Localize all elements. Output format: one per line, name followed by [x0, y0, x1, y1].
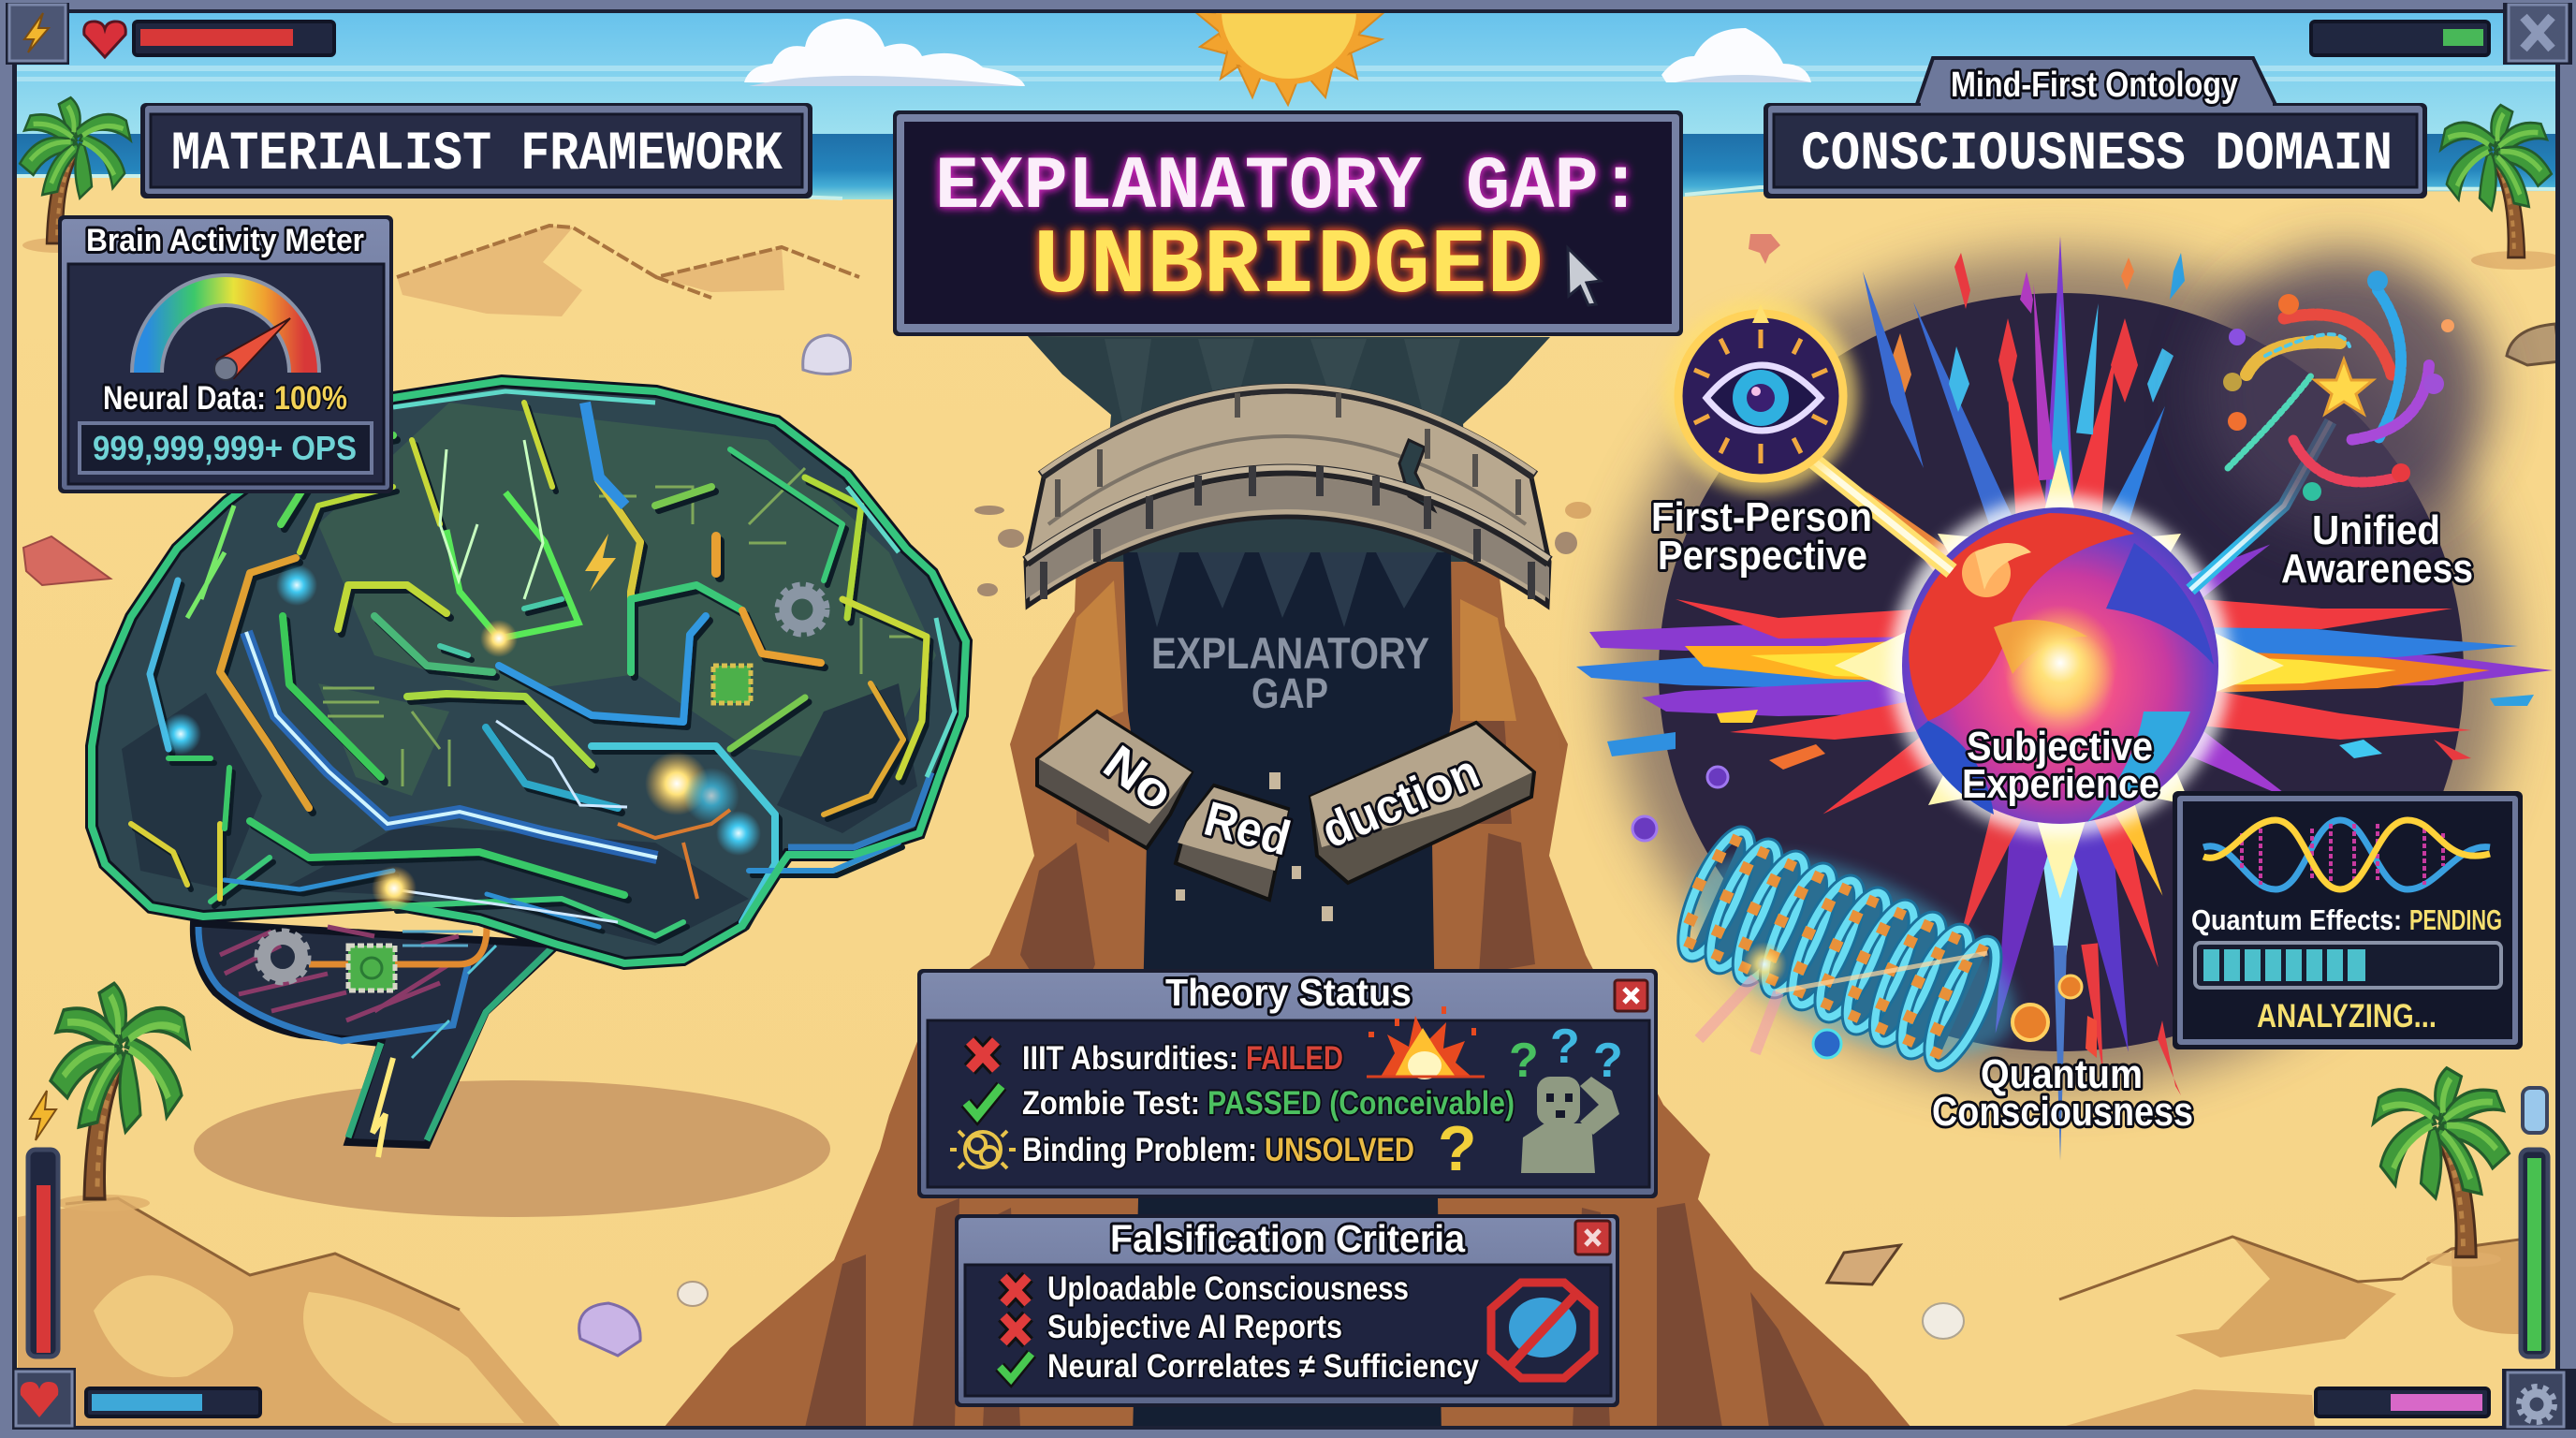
heading: consciousness domain with tab: Mind-First Ontology: [1951, 66, 2238, 105]
icon: question marks: ?: [1550, 1020, 1580, 1074]
status rows: [966, 1040, 1515, 1168]
labels on the consciousness domain: Experience: [1962, 761, 2159, 807]
status rows: PASSED (Conceivable): [1208, 1085, 1515, 1122]
left streaks: [1589, 618, 1919, 651]
gap label: GAP: [1251, 669, 1328, 717]
chip: [348, 946, 395, 990]
broken bridge slabs: No / Red / duction: Red: [1198, 792, 1295, 866]
dark cosmic halo: [1610, 253, 2509, 1086]
criteria rows: Uploadable Consciousness: [1047, 1270, 1409, 1307]
burst of colored rays: [1576, 236, 2553, 1161]
heading: materialist framework: MATERIALIST FRAMEWORK: [171, 125, 783, 185]
icon: quantum microtubule: [1661, 812, 2043, 1097]
heading: consciousness domain with tab: [1764, 58, 2427, 198]
corner button: heart: [12, 1368, 76, 1430]
circuit traces: [131, 403, 927, 936]
icon: question marks: [1438, 1020, 1623, 1184]
diagonals: [2042, 236, 2076, 545]
icon: question marks: ?: [1593, 1034, 1623, 1088]
labels on the consciousness domain: Perspective: [1658, 533, 1867, 579]
icon: galaxy: [2199, 253, 2489, 534]
status rows: IIIT Absurdities:: [1022, 1040, 1238, 1077]
hud: top right energy bar: [2311, 22, 2489, 55]
icon: question marks: ?: [1438, 1113, 1477, 1184]
gap label: [1151, 628, 1429, 717]
labels on the consciousness domain: Unified: [2312, 507, 2440, 553]
broken bridge slabs: No / Red / duction: duction: [1314, 744, 1487, 858]
cerebrum: [92, 381, 966, 963]
chip: [713, 666, 751, 703]
wave: [2203, 820, 2490, 889]
floating shards: [1863, 253, 2185, 1095]
panel: theory status: Theory Status: [1165, 971, 1412, 1014]
panel: quantum effects: [2173, 791, 2523, 1049]
icon: no brain sign: [1491, 1283, 1594, 1378]
labels on the consciousness domain: Awareness: [2281, 546, 2473, 592]
outline colour: [92, 381, 966, 963]
labels on the consciousness domain: [1651, 494, 2473, 1135]
progress bar: [2195, 943, 2501, 988]
panel: brain activity meter: [58, 215, 393, 493]
panel: quantum effects: ANALYZING...: [2257, 998, 2437, 1034]
beams: [1811, 459, 1952, 571]
dunes: lower right: [2059, 1237, 2520, 1428]
hud: lower right bar: [2316, 1388, 2489, 1416]
panel: falsification criteria: [955, 1214, 1619, 1407]
criteria rows: Subjective AI Reports: [1047, 1309, 1342, 1345]
criteria rows: Neural Correlates ≠ Sufficiency: [1047, 1348, 1479, 1385]
right streaks: [2200, 646, 2553, 688]
heading: consciousness domain with tab: CONSCIOUSNESS DOMAIN: [1801, 125, 2393, 185]
labels on the consciousness domain: Subjective: [1967, 724, 2153, 770]
broken bridge slabs: No / Red / duction: No: [1093, 735, 1183, 821]
gap label: EXPLANATORY: [1151, 628, 1429, 678]
dunes: lower left: [18, 1198, 562, 1428]
hud: health heart and bar: [84, 22, 334, 57]
panel: brain activity meter: Brain Activity Meter: [86, 223, 364, 258]
dunes: upper left: [397, 226, 859, 316]
clouds: [744, 19, 1811, 86]
blue lightning: [246, 632, 657, 858]
status rows: Zombie Test:: [1022, 1085, 1200, 1122]
central orb: [1890, 495, 2231, 836]
bridge: [1026, 386, 1549, 606]
icon: confused zombie: [1521, 1077, 1619, 1173]
sparks and bolts: [645, 752, 709, 815]
labels on the consciousness domain: Quantum: [1981, 1051, 2143, 1097]
criteria rows: [1000, 1270, 1479, 1385]
greener gyri patches: [318, 403, 936, 796]
panel: theory status: [917, 969, 1658, 1198]
brain: materialist neural circuitry: [92, 381, 966, 1217]
gear: [264, 938, 301, 976]
status rows: UNSOLVED: [1265, 1132, 1414, 1168]
corner button: lightning: [6, 3, 69, 65]
hud: left vertical gauge: [28, 1091, 58, 1357]
icon: question marks: ?: [1509, 1034, 1539, 1088]
hud: lower left bar: [86, 1388, 260, 1416]
panel: brain activity meter: 999,999,999+ OPS: [93, 429, 357, 467]
title panel: UNBRIDGED: [1033, 215, 1544, 319]
corner button: close: [2503, 3, 2572, 65]
cerebellum and brain stem: [194, 923, 558, 1157]
chasm and cliffs: [664, 336, 1911, 1438]
heading: materialist framework: [140, 103, 812, 198]
brown cliff walls: [664, 562, 1911, 1428]
corner button: settings gear: [2502, 1369, 2576, 1430]
labels on the consciousness domain: Consciousness: [1932, 1089, 2193, 1135]
gauge: [147, 290, 304, 380]
beach shells and rocks: [23, 234, 2560, 1356]
panel: falsification criteria: Falsification Criteria: [1110, 1217, 1466, 1260]
title panel: [893, 110, 1683, 336]
consciousness domain illustration: [1576, 236, 2553, 1161]
icon: sun: [1194, 11, 1385, 105]
icon: explosion: [1367, 1006, 1485, 1079]
quantum particles: [1632, 767, 2082, 1058]
panel: quantum effects: PENDING: [2409, 903, 2502, 936]
broken bridge slabs: No / Red / duction: [1037, 712, 1534, 921]
PCB fine lines: [323, 468, 922, 786]
status rows: Binding Problem:: [1022, 1132, 1257, 1168]
green lightning: [446, 492, 578, 638]
panel: quantum effects: Quantum Effects:: [2191, 903, 2402, 936]
gear: [785, 593, 819, 626]
close button: [1575, 1221, 1610, 1255]
title panel: EXPLANATORY GAP:: [935, 145, 1643, 230]
icon: first-person eye: [1663, 299, 1858, 493]
icon: tangled knot: [950, 1131, 1016, 1168]
chasm void: [1123, 552, 1453, 1438]
status rows: FAILED: [1246, 1040, 1343, 1077]
panel: brain activity meter: Neural Data:: [103, 380, 266, 417]
hud: right vertical gauge and potion: [2521, 1088, 2548, 1357]
icon: mouse cursor: [1568, 248, 1601, 305]
panel: brain activity meter: 100%: [274, 380, 347, 417]
labels on the consciousness domain: First-Person: [1651, 494, 1872, 540]
brain shadow: [194, 1080, 830, 1217]
close button: [1615, 980, 1647, 1011]
